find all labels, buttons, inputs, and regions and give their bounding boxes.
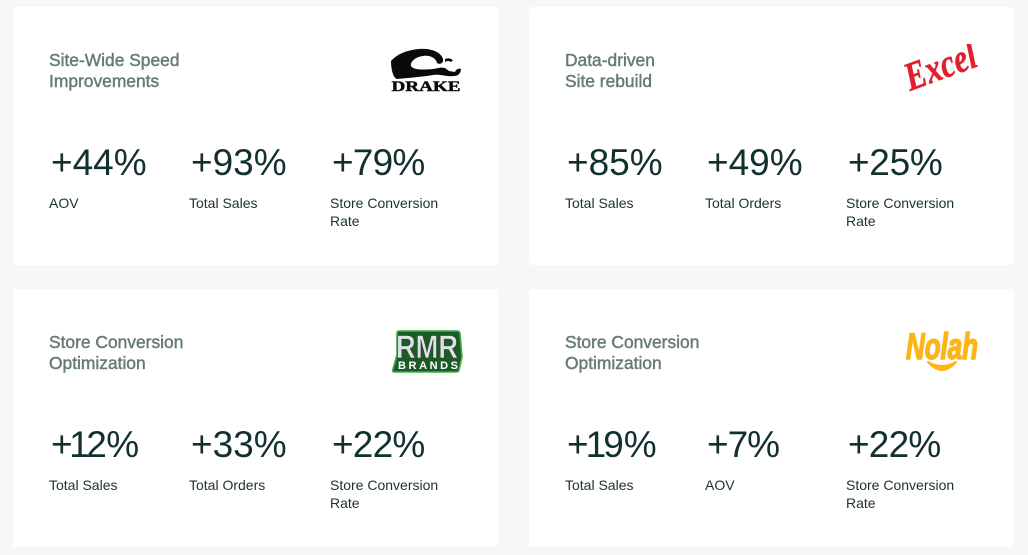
heading: Site-Wide Speed [49, 50, 180, 70]
metric: AOV [49, 142, 147, 211]
metric: Total Orders [189, 424, 287, 493]
metric: Total Sales [189, 142, 287, 211]
metric: Total Sales [49, 424, 139, 493]
metric: Total Sales: Total Sales [49, 477, 117, 493]
heading [565, 50, 655, 91]
panel: RMR Brands store conversion optimization [13, 289, 498, 547]
metric: Total Orders: Total Orders [189, 477, 265, 493]
metric: Store Conversion Rate: Rate [846, 213, 876, 229]
metric: AOV: AOV [49, 195, 79, 211]
heading: Optimization [565, 353, 662, 373]
heading: Store Conversion [49, 332, 183, 352]
metric: Store Conversion Rate: Store Conversion [846, 195, 954, 211]
metric: AOV [705, 424, 779, 493]
metric: Total Sales [565, 142, 663, 211]
logo: Drake: DRAKE [392, 79, 460, 95]
metric: Store Conversion Rate: Store Conversion [330, 477, 438, 493]
metric: Total Sales: Total Sales [565, 195, 633, 211]
metric: Total Orders: +49% [707, 142, 803, 183]
metric: Total Orders [705, 142, 803, 211]
metric: Total Sales: +12% [51, 424, 139, 465]
metric: Store Conversion Rate: +22% [332, 424, 424, 465]
metric: Store Conversion Rate: Rate [846, 495, 876, 511]
metric: Store Conversion Rate: +79% [332, 142, 424, 183]
metric: Total Orders: Total Orders [705, 195, 781, 211]
heading [565, 332, 699, 373]
heading: Store Conversion [565, 332, 699, 352]
metric: Store Conversion Rate [846, 142, 954, 229]
heading: Improvements [49, 71, 159, 91]
metric: Total Sales: +19% [567, 424, 657, 465]
metric: Total Sales: +85% [567, 142, 663, 183]
metric: Store Conversion Rate [846, 424, 954, 511]
panel: Excel data-driven site rebuild [529, 7, 1014, 265]
metric: Total Sales [565, 424, 657, 493]
panel: Nolah store conversion optimization [529, 289, 1014, 547]
metric: Store Conversion Rate: Rate [330, 495, 360, 511]
metric: AOV: +7% [707, 424, 779, 465]
metric: Store Conversion Rate [330, 142, 438, 229]
heading: Data-driven [565, 50, 655, 70]
metric: Store Conversion Rate [330, 424, 438, 511]
logo: RMR Brands: RMR [396, 329, 458, 365]
heading: Site rebuild [565, 71, 652, 91]
metric: Store Conversion Rate: Store Conversion [846, 477, 954, 493]
panel: Drake site-wide speed improvements [13, 7, 498, 265]
metric: Store Conversion Rate: Rate [330, 213, 360, 229]
heading [49, 332, 183, 373]
metric: Total Sales: Total Sales [565, 477, 633, 493]
heading: Optimization [49, 353, 146, 373]
logo: RMR Brands: BRANDS [398, 360, 458, 372]
metric: Total Sales: +93% [191, 142, 287, 183]
metric: Total Orders: +33% [191, 424, 287, 465]
metric: Store Conversion Rate: +22% [848, 424, 940, 465]
heading [49, 50, 180, 91]
metric: AOV: +44% [51, 142, 147, 183]
metric: Store Conversion Rate: +25% [848, 142, 942, 183]
metric: AOV: AOV [705, 477, 735, 493]
metric: Store Conversion Rate: Store Conversion [330, 195, 438, 211]
metric: Total Sales: Total Sales [189, 195, 257, 211]
logo: Drake [391, 48, 461, 95]
